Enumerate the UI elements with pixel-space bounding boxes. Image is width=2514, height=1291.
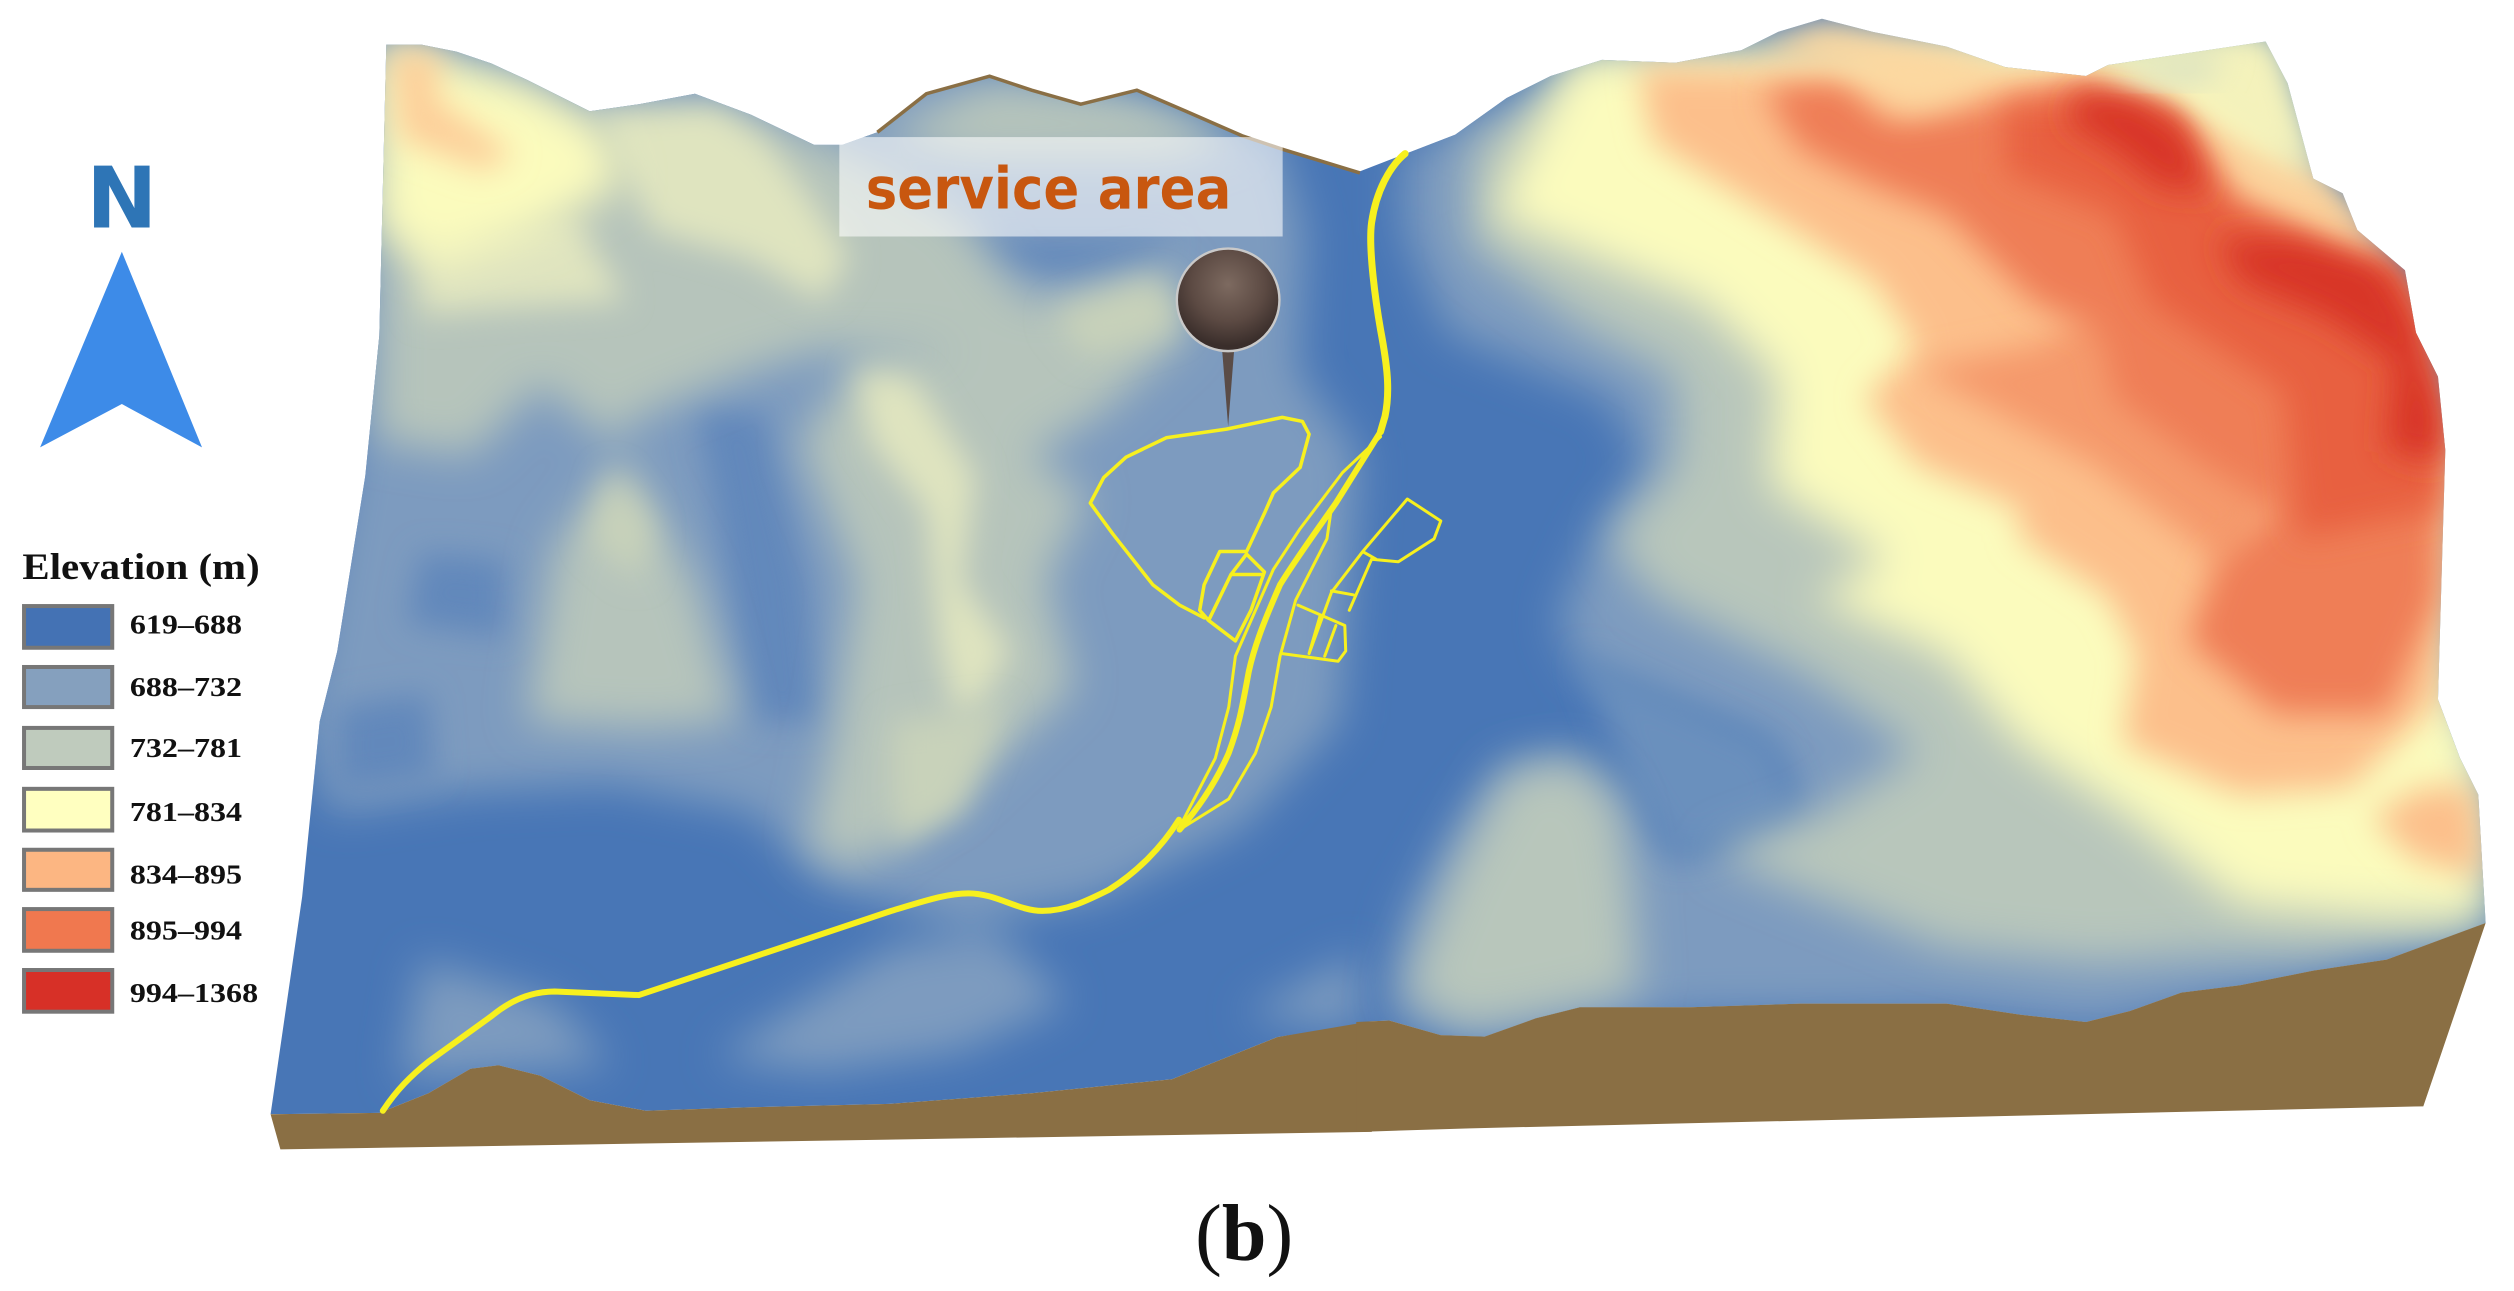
location pin (1177, 249, 1279, 426)
legend item 895-994: 895–994 (130, 916, 243, 946)
legend item 994-1368 (24, 970, 258, 1012)
back ridge outline (877, 76, 1360, 173)
legend item 619-688: 619–688 (130, 609, 242, 639)
service area label: service area (866, 154, 1231, 222)
elevation legend (22, 546, 260, 1012)
soil block cross-section east (1356, 923, 2486, 1132)
soil block cross-section west (271, 1023, 1372, 1149)
legend item 732-781 (24, 728, 242, 768)
legend item 834-895 (24, 850, 242, 890)
legend item 781-834 (24, 789, 243, 831)
road network (1090, 154, 1441, 830)
legend title: Elevation (m) (22, 546, 260, 588)
west half shading (302, 34, 1360, 1079)
legend item 994-1368: 994–1368 (130, 978, 258, 1008)
south-east service area (1282, 499, 1441, 661)
legend item 781-834: 781–834 (130, 797, 243, 827)
legend item 688-732: 688–732 (130, 672, 242, 702)
lower access road (383, 820, 1179, 1111)
north arrow (40, 150, 202, 447)
legend item 688-732 (24, 667, 242, 707)
legend item 732-781: 732–781 (130, 733, 242, 763)
east half shading (1389, 21, 2489, 1044)
main road upper section (1371, 154, 1405, 432)
north arrow: N (86, 150, 157, 249)
legend item 619-688 (24, 606, 242, 648)
service area label (839, 137, 1283, 236)
north-west service loop (1090, 417, 1309, 641)
left carriageway (1180, 437, 1381, 827)
legend item 895-994 (24, 909, 243, 951)
central carriageway (1180, 432, 1381, 830)
panel caption: (b) (1195, 1190, 1293, 1278)
right carriageway (1180, 508, 1331, 830)
legend item 834-895: 834–895 (130, 859, 242, 889)
